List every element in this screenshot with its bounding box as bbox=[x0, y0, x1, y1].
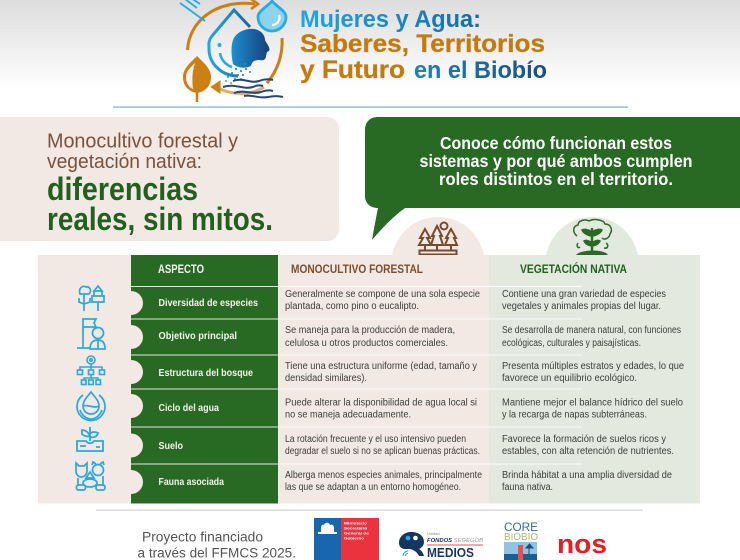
title: y Futuro bbox=[300, 56, 405, 84]
row: ciclo del agua bbox=[77, 392, 683, 420]
row: diversidad de especies: Generalmente se compone de una sola especie bbox=[285, 289, 480, 300]
logo: ministerio: General de bbox=[344, 530, 370, 536]
logo: core biobio: BIOBIO bbox=[504, 531, 538, 543]
logo: head silhouette bbox=[225, 29, 269, 84]
logo: ministerio: Ministerio bbox=[344, 520, 368, 526]
icon: org structure bbox=[78, 356, 104, 384]
row: ciclo del agua: no se maneja adecuadamente. bbox=[285, 410, 411, 420]
panel: heading bbox=[0, 117, 339, 241]
logo: orange cycle arrows bbox=[188, 0, 282, 94]
title: Mujeres y Agua: bbox=[300, 6, 481, 33]
speech bubble: roles distintos en el territorio. bbox=[439, 169, 673, 189]
panel: heading: vegetación nativa: bbox=[47, 151, 202, 173]
title: Saberes, Territorios bbox=[300, 30, 545, 58]
speech bubble: sistemas y por qué ambos cumplen bbox=[420, 151, 692, 171]
column headers bbox=[158, 261, 627, 276]
panel: heading: diferencias bbox=[47, 171, 198, 207]
logo: fondos medios: MEDIOS bbox=[427, 546, 474, 560]
tab: monoculture bbox=[392, 217, 484, 255]
row: diversidad de especies: Contiene una gran variedad de especies bbox=[502, 289, 666, 300]
header logo bbox=[180, 0, 286, 102]
row: objetivo principal bbox=[77, 319, 681, 349]
row: fauna asociada: Fauna asociada bbox=[158, 477, 224, 488]
column headers: VEGETACIÓN NATIVA bbox=[520, 261, 627, 276]
row: fauna asociada: fauna nativa. bbox=[502, 482, 553, 493]
logo: fondos medios: FONDOS SEGEGOB bbox=[427, 538, 484, 544]
icon: person with flag bbox=[77, 319, 105, 349]
row: ciclo del agua: Mantiene mejor el balance hídrico del suelo bbox=[502, 398, 683, 408]
tab: native vegetation bbox=[546, 217, 638, 255]
icon: pine trees bbox=[419, 222, 457, 254]
row: estructura del bosque: densidad similares). bbox=[285, 373, 367, 384]
row: estructura del bosque: Presenta múltiples estratos y edades, lo que bbox=[502, 361, 684, 372]
row: suelo: La rotación frecuente y el uso intensivo pueden bbox=[285, 434, 466, 445]
panel: heading: Monocultivo forestal y bbox=[47, 130, 238, 152]
row: ciclo del agua: Puede alterar la disponibilidad de agua local si bbox=[285, 398, 477, 408]
logo: fondos medios: Unidad bbox=[427, 531, 440, 536]
footer text: Proyecto financiado bbox=[142, 530, 263, 544]
row: diversidad de especies bbox=[79, 286, 666, 312]
title: en el Biobío bbox=[414, 57, 547, 84]
logo: nos: nos bbox=[557, 529, 607, 559]
logo: ministerio bbox=[314, 518, 379, 560]
row: suelo: degradar el suelo si no se aplican buenas prácticas. bbox=[285, 446, 480, 457]
speech bubble bbox=[365, 117, 740, 240]
row: suelo bbox=[77, 427, 674, 457]
panel: heading: reales, sin mitos. bbox=[47, 201, 273, 237]
icon: native tree bbox=[574, 220, 611, 255]
logo: ministerio: Secretaría bbox=[344, 526, 368, 530]
icon: water cycle bbox=[77, 392, 105, 420]
row: estructura del bosque: Estructura del bosque bbox=[158, 368, 253, 379]
icon: two trees bbox=[79, 286, 104, 311]
logo: core biobio bbox=[504, 520, 538, 560]
row: objetivo principal: Se desarrolla de manera natural, con funciones bbox=[502, 325, 681, 336]
logo: orange leaf bbox=[183, 56, 211, 102]
table backgrounds bbox=[38, 255, 700, 504]
icon: animals bbox=[76, 462, 105, 490]
row: suelo: estables, con alta retención de nutrientes. bbox=[502, 446, 674, 457]
row: suelo: Suelo bbox=[158, 441, 183, 452]
row: diversidad de especies: Diversidad de especies bbox=[158, 298, 258, 309]
logo: large water drop outline bbox=[209, 10, 250, 76]
title bbox=[300, 6, 547, 84]
logo: small water drop bbox=[258, 1, 286, 31]
logo: core biobio: CORE bbox=[504, 520, 538, 534]
speech bubble: Conoce cómo funcionan estos bbox=[440, 133, 672, 153]
row: objetivo principal: ecológicas, culturales y paisajísticas. bbox=[502, 338, 641, 349]
column headers: MONOCULTIVO FORESTAL bbox=[291, 262, 423, 276]
comparison table bbox=[38, 255, 700, 504]
row: fauna asociada: las que se adaptan a un entorno homogéneo. bbox=[285, 482, 461, 493]
row: fauna asociada bbox=[76, 462, 672, 493]
row: fauna asociada: Brinda hábitat a una amplia diversidad de bbox=[502, 470, 672, 481]
column headers: ASPECTO bbox=[158, 262, 204, 276]
row: diversidad de especies: plantada, como pino o eucalipto. bbox=[285, 301, 419, 312]
row: estructura del bosque: Tiene una estructura uniforme (edad, tamaño y bbox=[285, 361, 477, 372]
row: objetivo principal: celulosa u otros productos comerciales. bbox=[285, 338, 448, 349]
footer text bbox=[138, 530, 296, 560]
row: estructura del bosque: favorece un equilibrio ecológico. bbox=[502, 373, 637, 384]
row: objetivo principal: Objetivo principal bbox=[158, 331, 237, 342]
row: objetivo principal: Se maneja para la producción de madera, bbox=[285, 325, 455, 336]
logo: fondos medios bbox=[399, 531, 484, 560]
logo: utensil lines bbox=[180, 0, 205, 21]
row: ciclo del agua: Ciclo del agua bbox=[158, 403, 219, 414]
logo: ministerio: Gobierno bbox=[344, 536, 365, 540]
icon: sprout in soil bbox=[77, 427, 103, 451]
row: fauna asociada: Alberga menos especies animales, principalmente bbox=[285, 470, 482, 481]
row: estructura del bosque bbox=[78, 356, 684, 384]
row: diversidad de especies: vegetales y animales propias del lugar. bbox=[502, 301, 661, 312]
logo: waves bbox=[223, 79, 283, 97]
row: ciclo del agua: y la recarga de napas subterráneas. bbox=[502, 410, 647, 420]
row: suelo: Favorece la formación de suelos ricos y bbox=[502, 434, 666, 445]
